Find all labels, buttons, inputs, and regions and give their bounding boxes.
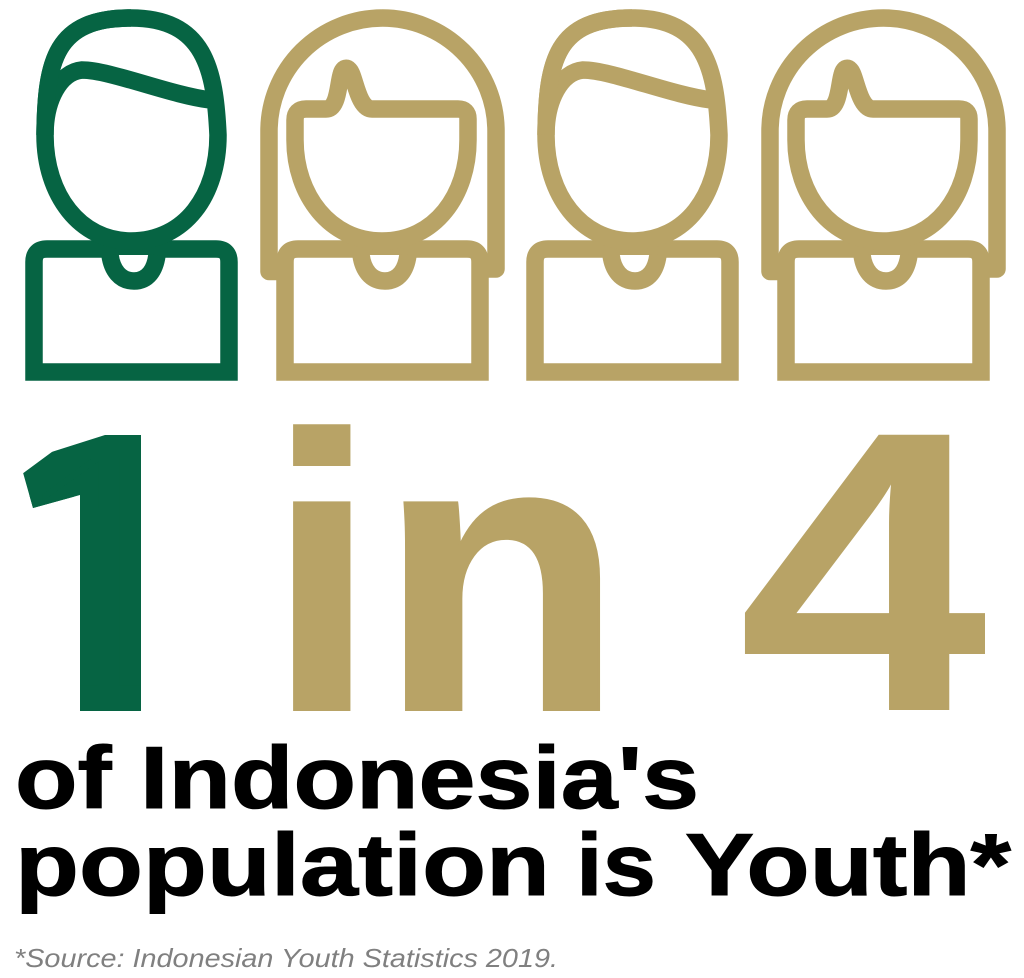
icon: people row [34, 18, 997, 372]
source note: *Source: Indonesian Youth Statistics 2019. [14, 943, 558, 973]
big number: 1: 1 [6, 360, 196, 793]
headline line 2: is [576, 815, 656, 914]
headline line 2: population [15, 815, 550, 914]
icon: female figure gold second [770, 18, 997, 372]
big word: in: in [266, 355, 624, 794]
headline line 2: Youth* [685, 815, 1012, 914]
headline line 2 [15, 815, 1012, 914]
headline line 1: of Indonesia's [15, 728, 699, 827]
icon: female figure gold [269, 18, 496, 372]
icon: male figure gold [535, 18, 730, 372]
big number: 4: 4 [738, 348, 997, 795]
icon: male figure green [34, 18, 229, 372]
